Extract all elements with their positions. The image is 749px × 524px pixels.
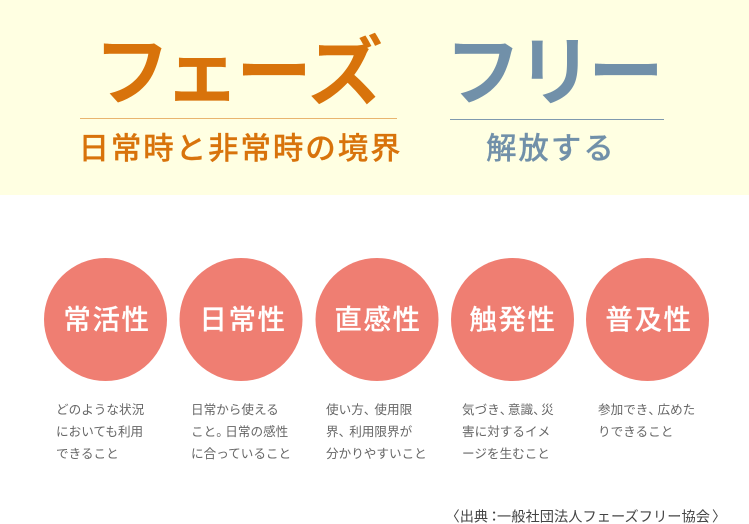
item: 日常性 — [180, 258, 302, 461]
heading: free: 解放する — [486, 132, 616, 166]
item: 常活性: どのような状況 — [56, 403, 145, 417]
heading: free — [445, 31, 664, 166]
heading: phase: 日常時と非常時の境界 — [78, 132, 402, 166]
item: 触発性: 気づき、意識、災 — [462, 402, 554, 417]
item: 常活性 — [44, 258, 167, 461]
item: 日常性: に合っていること — [191, 447, 291, 461]
header panel — [0, 0, 749, 195]
item: 普及性: りできること — [598, 425, 673, 439]
item: 常活性: 常活性 — [63, 304, 151, 335]
item: 直感性: 使い方、使用限 — [326, 402, 413, 417]
item: 触発性 — [451, 258, 574, 461]
item: 直感性: 分かりやすいこと — [326, 447, 427, 461]
item: 常活性: できること — [56, 447, 119, 461]
item: 常活性: においても利用 — [56, 425, 143, 439]
item: 触発性: ージを生むこと — [462, 447, 550, 461]
item: 日常性: 日常性 — [199, 304, 287, 335]
item: 触発性: 触発性 — [469, 304, 557, 335]
heading: free: フリー — [445, 31, 664, 116]
item: 普及性: 普及性 — [605, 304, 693, 335]
item: 直感性: 界、利用限界が — [326, 425, 413, 439]
item: 触発性: 害に対するイメ — [462, 424, 550, 439]
heading: phase: フェーズ — [94, 31, 383, 116]
item: 普及性: 参加でき、広めた — [598, 403, 695, 417]
item: 日常性: こと。日常の感性 — [191, 424, 288, 439]
item: 直感性: 直感性 — [334, 304, 422, 335]
item: 直感性 — [316, 258, 438, 461]
item: 普及性 — [586, 258, 709, 439]
heading: phase — [78, 31, 402, 166]
item: 日常性: 日常から使える — [191, 402, 279, 417]
